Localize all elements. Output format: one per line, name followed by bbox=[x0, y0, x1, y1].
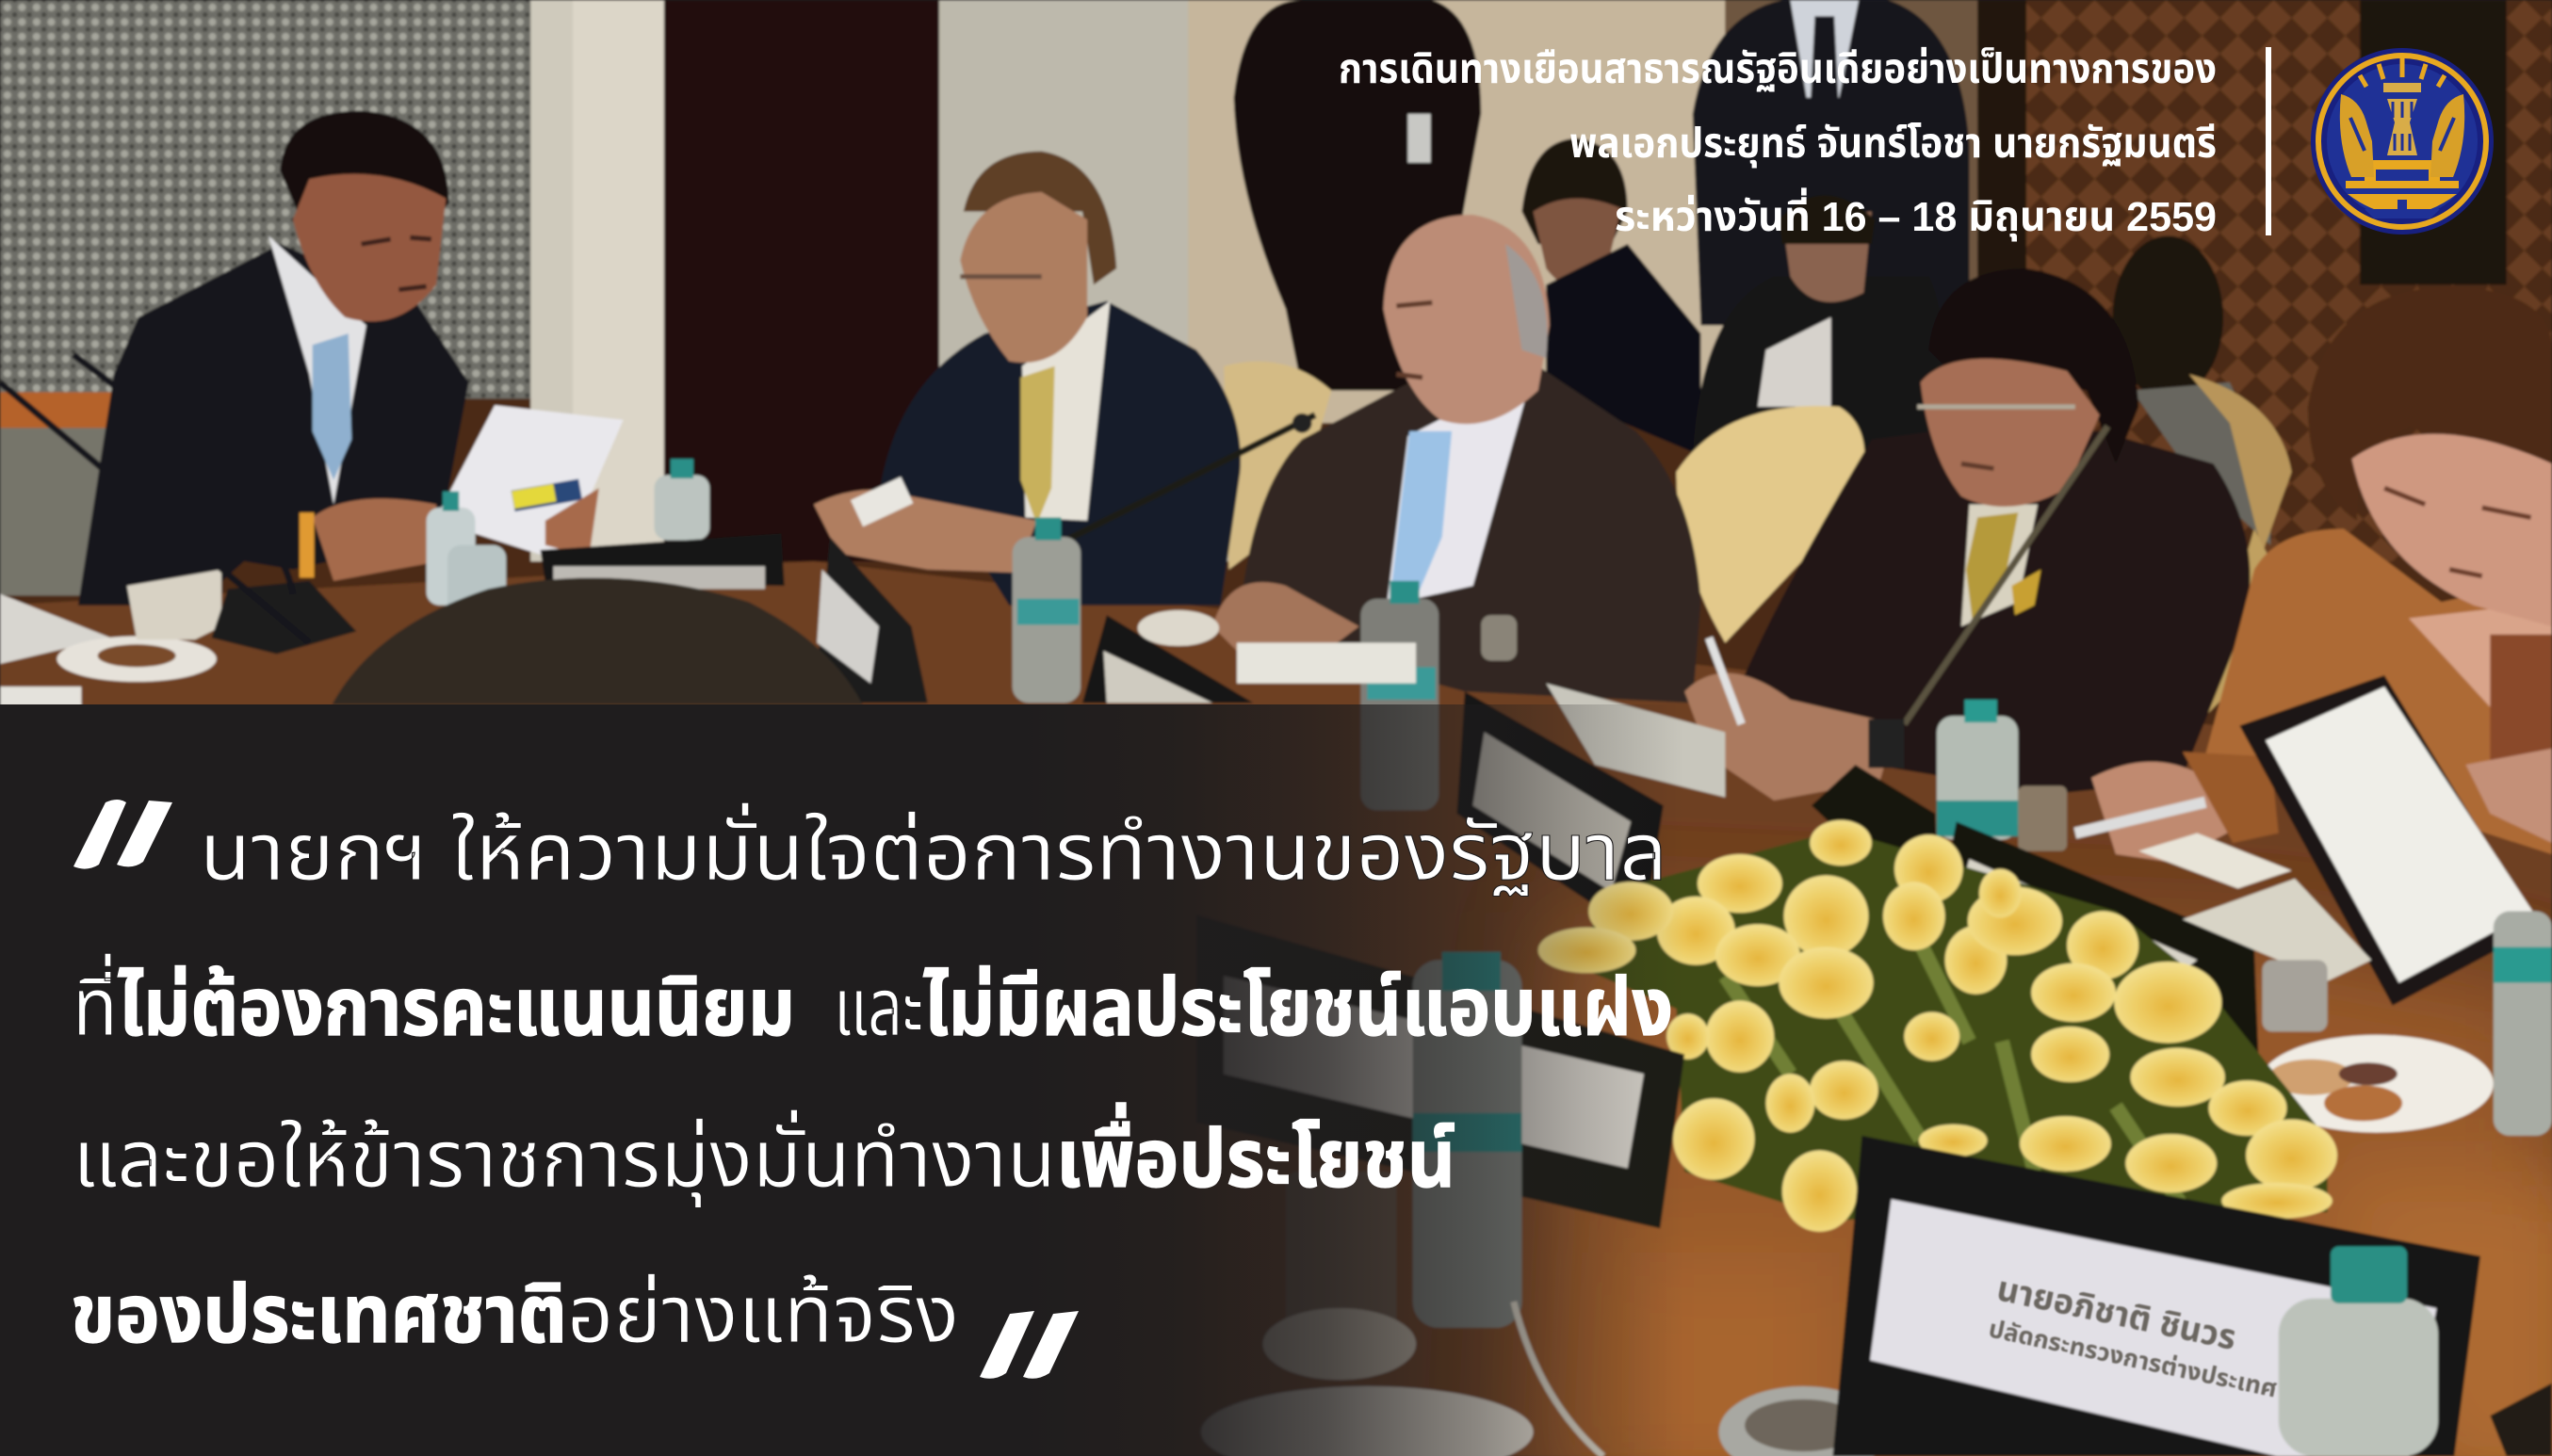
name plates and bottles along the table bbox=[541, 517, 2552, 1136]
name card line 2: ปลัดกระทรวงการต่างประเทศ bbox=[1986, 1314, 2280, 1402]
quote line 3: เพื่อประโยชน์ bbox=[1056, 1102, 1455, 1205]
icon: government emblem bbox=[2311, 48, 2494, 235]
name card line 1: นายอภิชาติ ชินวร bbox=[1993, 1269, 2240, 1357]
closing quotation mark bbox=[980, 1311, 1079, 1379]
quote text block bbox=[71, 800, 1673, 1379]
quote line 4 bbox=[71, 1270, 959, 1360]
table surface bbox=[0, 561, 2552, 1456]
quote line 3: และขอให้ข้าราชการมุ่งมั่นทำงาน bbox=[73, 1109, 1056, 1207]
quote line 4: ของประเทศชาติ bbox=[71, 1270, 567, 1360]
quote line 2: ไม่มีผลประโยชน์แอบแฝง bbox=[923, 963, 1673, 1053]
header line 1: การเดินทางเยือนสาธารณรัฐอินเดียอย่างเป็นทางการของ bbox=[1339, 46, 2217, 92]
quote line 2: ไม่ต้องการคะแนนนิยม bbox=[118, 963, 795, 1053]
quote line 1: นายกฯ ให้ความมั่นใจต่อการทำงานของรัฐบาล bbox=[200, 802, 1667, 898]
name card text on table bbox=[1986, 1269, 2289, 1402]
dark quote panel bbox=[0, 704, 2552, 1456]
standing staff in background bbox=[1234, 0, 1970, 391]
opening quotation mark bbox=[73, 800, 172, 869]
man at left reading documents bbox=[78, 110, 624, 606]
quote line 2 bbox=[73, 953, 1673, 1053]
header line 2: พลเอกประยุทธ์ จันทร์โอชา นายกรัฐมนตรี bbox=[1569, 121, 2217, 169]
front name plates and table objects bbox=[332, 578, 2552, 1456]
man with glasses second from left bbox=[814, 152, 1241, 606]
man with microphone writing bbox=[1684, 268, 2251, 801]
centre man speaking bbox=[1066, 215, 1700, 703]
header line 3: ระหว่างวันที่ 16 – 18 มิถุนายน 2559 bbox=[1615, 187, 2217, 242]
yellow chairs bbox=[1224, 362, 2292, 724]
background seated staff bbox=[1521, 138, 2270, 545]
quote line 2: และ bbox=[834, 963, 923, 1053]
header text: official visit details bbox=[1339, 46, 2217, 242]
woman at right in orange jacket bbox=[2075, 286, 2552, 863]
quote line 4: อย่างแท้จริง bbox=[567, 1270, 959, 1360]
table items at left bbox=[0, 355, 709, 706]
quote line 3 bbox=[73, 1102, 1455, 1207]
divider line between header and emblem bbox=[2266, 47, 2271, 235]
quote line 2: ที่ bbox=[73, 953, 118, 1053]
yellow flower arrangement bbox=[1538, 820, 2337, 1232]
